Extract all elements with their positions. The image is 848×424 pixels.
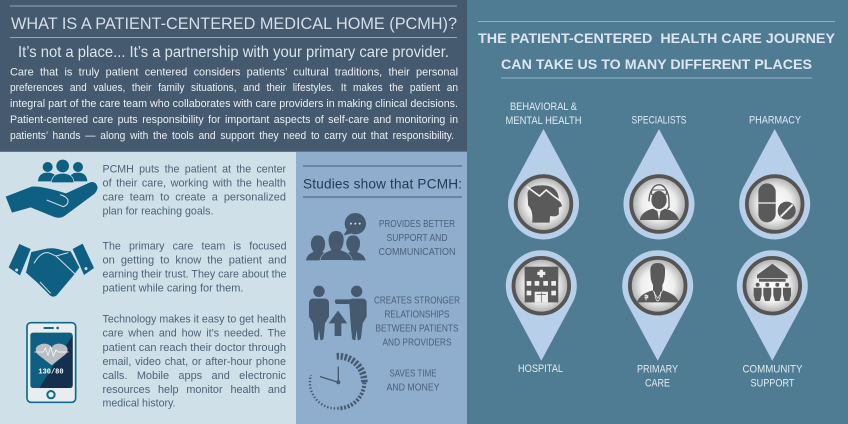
heading: patient-centered health care journey <box>478 31 835 72</box>
text block: primary care team: patient while caring for them. <box>102 282 244 294</box>
icon: handshake <box>9 244 94 297</box>
icon: hospital pin <box>506 250 577 361</box>
label: behavioral and mental health: BEHAVIORAL & <box>510 101 577 113</box>
label: community support: SUPPORT <box>750 378 795 390</box>
icon: clock <box>310 356 364 408</box>
text block: patient at the center: of their care, working with the health <box>102 178 286 190</box>
heading: PCMH question: WHAT IS A PATIENT-CENTERED MEDICAL HOME (PCMH)? <box>11 15 457 33</box>
heading: patient-centered health care journey: CAN TAKE US TO MANY DIFFERENT PLACES <box>501 57 812 72</box>
icon: patient and provider with arrow <box>309 286 367 340</box>
label: primary care <box>637 364 678 390</box>
icon: smartphone with heart reading: 130/80 <box>38 369 64 377</box>
text block: technology: calls. Mobile apps and electronic <box>102 370 286 382</box>
icon: hand holding people <box>6 160 98 218</box>
text block: technology: Technology makes it easy to get health <box>102 314 286 326</box>
text block: primary care team <box>102 240 286 294</box>
text block: patient-centered care description: integral part of the care team who collaborates with care providers in making clinical decisions. <box>10 98 458 110</box>
text block: technology: patient can reach their doctor through <box>102 342 286 354</box>
text block: patient-centered care description: preferences and values, their family situations, and their lifestyles. It makes the patient an <box>10 82 458 94</box>
icon: behavioral health drop <box>508 129 579 239</box>
text block: stronger relationships <box>374 295 460 348</box>
icon: primary care pin <box>622 250 693 361</box>
text block: better support: COMMUNICATION <box>378 247 456 258</box>
text block: primary care team: The primary care team is focused <box>102 240 286 252</box>
text block: primary care team: on getting to know the patient and <box>102 254 286 266</box>
label: hospital: HOSPITAL <box>518 363 563 375</box>
icon: smartphone with heart reading <box>27 323 76 402</box>
icon: group with speech bubble <box>306 213 366 260</box>
label: behavioral and mental health: MENTAL HEALTH <box>506 115 582 127</box>
icon: community support pin <box>737 250 808 361</box>
label: community support <box>742 364 802 390</box>
text block: patient-centered care description: Care that is truly patient centered considers patients’ cultural traditions, their personal <box>10 66 458 78</box>
text block: stronger relationships: BETWEEN PATIENTS <box>376 323 459 334</box>
icon: specialist drop <box>624 129 694 239</box>
text block: better support: PROVIDES BETTER <box>379 219 455 230</box>
text block: patient at the center <box>102 164 286 218</box>
text block: better support: SUPPORT AND <box>386 233 448 244</box>
heading: studies show that PCMH: Studies show that PCMH: <box>303 176 462 192</box>
text block: technology: resources help monitor health and <box>102 384 286 396</box>
text block: saves time and money <box>386 369 440 394</box>
text block: patient at the center: care team to create a personalized <box>102 192 286 204</box>
panel: how PCMH works <box>0 152 296 424</box>
text block: stronger relationships: CREATES STRONGER <box>374 295 460 306</box>
text block: patient-centered care description: patients’ hands — along with the tools and support they need to carry out that responsibility. <box>10 130 454 142</box>
text block: technology: medical history. <box>102 398 176 410</box>
text block: patient-centered care description: Patient-centered care puts responsibility for important aspects of self-care and monitoring in <box>10 114 458 126</box>
text block: saves time and money: SAVES TIME <box>390 369 437 380</box>
panel: health care journey <box>478 21 835 390</box>
text block: technology: care when and how it’s needed. The <box>102 328 286 340</box>
label: pharmacy: PHARMACY <box>749 114 801 126</box>
text block: patient at the center: PCMH puts the patient at the center <box>102 164 286 176</box>
text block: saves time and money: AND MONEY <box>386 383 440 394</box>
icon: pharmacy drop <box>739 129 810 239</box>
heading: patient-centered health care journey: THE PATIENT-CENTERED HEALTH CARE JOURNEY <box>478 31 835 46</box>
label: primary care: CARE <box>645 378 670 390</box>
subtitle: partnership: It’s not a place... It’s a partnership with your primary care provider. <box>18 44 449 61</box>
text block: technology <box>102 314 286 410</box>
label: community support: COMMUNITY <box>742 364 802 376</box>
text block: stronger relationships: RELATIONSHIPS <box>384 309 450 320</box>
text block: patient-centered care description <box>10 66 458 142</box>
text block: technology: email, video chat, or after-hour phone <box>102 356 286 368</box>
label: behavioral and mental health <box>506 101 582 127</box>
panel: what is a PCMH <box>0 0 467 151</box>
text block: better support <box>378 219 456 258</box>
panel: studies show <box>296 152 467 424</box>
text block: patient at the center: plan for reaching goals. <box>102 206 214 218</box>
text block: primary care team: earning their trust. They care about the <box>102 268 286 280</box>
text block: stronger relationships: AND PROVIDERS <box>382 337 452 348</box>
label: specialists: SPECIALISTS <box>632 114 686 126</box>
label: primary care: PRIMARY <box>637 364 678 376</box>
